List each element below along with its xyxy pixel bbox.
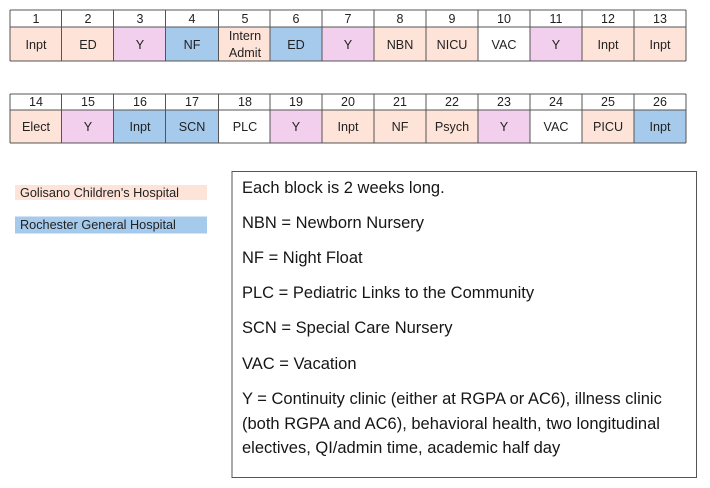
schedule row 2: blocks 14-26: 19 — [289, 95, 303, 109]
key box: PLC = Pediatric Links to the Community — [242, 284, 535, 302]
schedule row 2: blocks 14-26: 21 — [393, 95, 407, 109]
schedule row 1: blocks 1-13: ED — [287, 38, 305, 52]
schedule row 2: blocks 14-26: 25 — [601, 95, 615, 109]
schedule row 2: blocks 14-26: Psych — [435, 120, 469, 134]
schedule row 2: blocks 14-26: Elect — [22, 120, 50, 134]
schedule row 2: blocks 14-26: Inpt — [337, 120, 359, 134]
schedule row 1: blocks 1-13: ED — [79, 38, 97, 52]
schedule row 2: blocks 14-26: Inpt — [649, 120, 671, 134]
schedule row 1: blocks 1-13: Y — [344, 38, 353, 52]
schedule row 1: blocks 1-13: Y — [136, 38, 145, 52]
schedule row 1: blocks 1-13: 6 — [293, 12, 300, 26]
schedule row 1: blocks 1-13: NICU — [437, 38, 467, 52]
schedule row 2: blocks 14-26: 18 — [238, 95, 252, 109]
key box: VAC = Vacation — [242, 355, 356, 373]
schedule row 2: blocks 14-26: NF — [392, 120, 409, 134]
schedule row 1: blocks 1-13: 13 — [653, 12, 667, 26]
schedule row 1: blocks 1-13: Inpt — [649, 38, 671, 52]
schedule row 1: blocks 1-13: NBN — [387, 38, 413, 52]
schedule row 1: blocks 1-13: Inpt — [25, 38, 47, 52]
schedule row 1: blocks 1-13 — [10, 10, 686, 61]
schedule row 1: blocks 1-13: NF — [184, 38, 201, 52]
schedule row 2: blocks 14-26: 24 — [549, 95, 563, 109]
schedule row 2: blocks 14-26: Y — [84, 120, 93, 134]
schedule row 2: blocks 14-26 — [10, 94, 686, 143]
key box: SCN = Special Care Nursery — [242, 319, 453, 337]
schedule row 2: blocks 14-26: 26 — [653, 95, 667, 109]
schedule row 1: blocks 1-13: Admit — [229, 46, 262, 60]
legend: Rochester General Hospital: Rochester General Hospital — [20, 218, 176, 232]
schedule row 1: blocks 1-13: 1 — [33, 12, 40, 26]
legend: Rochester General Hospital — [15, 216, 207, 234]
schedule row 1: blocks 1-13: 9 — [449, 12, 456, 26]
key box: (both RGPA and AC6), behavioral health, two longitudinal — [242, 415, 660, 433]
schedule row 1: blocks 1-13: 10 — [497, 12, 511, 26]
schedule row 1: blocks 1-13: 5 — [242, 12, 249, 26]
schedule row 2: blocks 14-26: 15 — [81, 95, 95, 109]
schedule row 2: blocks 14-26: 20 — [341, 95, 355, 109]
schedule row 2: blocks 14-26: VAC — [544, 120, 568, 134]
key box: NBN = Newborn Nursery — [242, 214, 425, 232]
schedule row 2: blocks 14-26: SCN — [179, 120, 205, 134]
schedule row 2: blocks 14-26: 22 — [445, 95, 459, 109]
schedule row 2: blocks 14-26: 14 — [29, 95, 43, 109]
schedule row 2: blocks 14-26: PICU — [593, 120, 623, 134]
schedule row 2: blocks 14-26: 16 — [133, 95, 147, 109]
schedule row 1: blocks 1-13: Inpt — [597, 38, 619, 52]
legend: Golisano Children's Hospital: Golisano Children's Hospital — [20, 186, 179, 200]
schedule row 2: blocks 14-26: 23 — [497, 95, 511, 109]
key box: electives, QI/admin time, academic half day — [242, 439, 561, 457]
schedule row 1: blocks 1-13: Intern — [229, 29, 261, 43]
schedule row 2: blocks 14-26: PLC — [233, 120, 257, 134]
key box: Y = Continuity clinic (either at RGPA or AC6), illness clinic — [242, 390, 662, 408]
key box: Each block is 2 weeks long. — [242, 179, 445, 197]
schedule row 1: blocks 1-13: 3 — [137, 12, 144, 26]
schedule row 1: blocks 1-13: Y — [552, 38, 561, 52]
schedule row 1: blocks 1-13: VAC — [492, 38, 516, 52]
schedule row 2: blocks 14-26: Y — [500, 120, 509, 134]
schedule row 2: blocks 14-26: 17 — [185, 95, 199, 109]
schedule row 1: blocks 1-13: 7 — [345, 12, 352, 26]
key box — [232, 172, 696, 478]
schedule row 1: blocks 1-13: 8 — [397, 12, 404, 26]
schedule row 1: blocks 1-13: 2 — [85, 12, 92, 26]
schedule row 1: blocks 1-13: 4 — [189, 12, 196, 26]
schedule row 2: blocks 14-26: Y — [292, 120, 301, 134]
schedule row 2: blocks 14-26: Inpt — [129, 120, 151, 134]
key box: NF = Night Float — [242, 249, 363, 267]
schedule row 1: blocks 1-13: 12 — [601, 12, 615, 26]
schedule row 1: blocks 1-13: 11 — [550, 12, 563, 26]
